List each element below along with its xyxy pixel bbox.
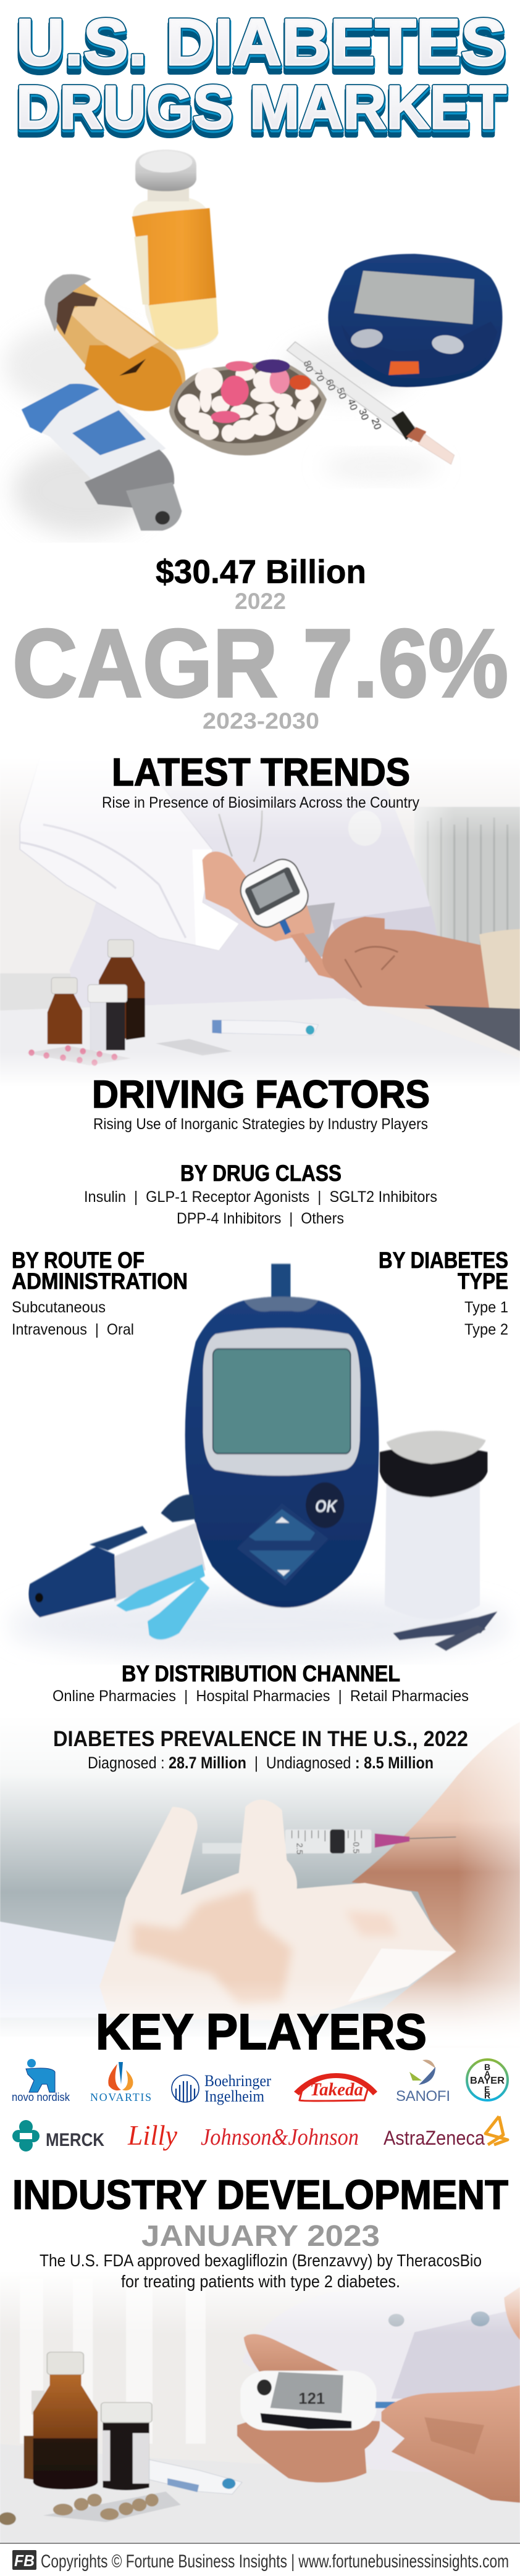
meter screen [213, 1349, 351, 1454]
icon: insulin syringe: 30 [356, 407, 371, 421]
table surface [0, 2444, 520, 2543]
heading: key players: KEY PLAYERS [96, 2004, 427, 2060]
photo: checking blood sugar with meter [0, 2271, 520, 2543]
text: development description [40, 2251, 482, 2291]
segment: by diabetes type: Type 1 [464, 1299, 508, 1316]
title: U.S. Diabetes Drugs Market [16, 5, 507, 148]
segment: by diabetes type: TYPE [458, 1269, 508, 1294]
title: U.S. Diabetes Drugs Market: U.S. DIABETES [16, 5, 506, 79]
logo: Sanofi [396, 2060, 450, 2105]
hero photo: diabetes supplies [3, 149, 503, 535]
icon: upright vial [132, 149, 218, 352]
icon: insulin syringe: 70 [312, 368, 326, 383]
doctor's hand with meter: 121 [298, 2390, 325, 2408]
heading: by distribution channel: BY DISTRIBUTION CHANNEL [122, 1661, 400, 1686]
icon: lying vial [44, 274, 185, 411]
title: U.S. Diabetes Drugs Market: DRUGS MARKET [16, 77, 506, 146]
logo: Boehringer Ingelheim: Boehringer [204, 2072, 271, 2090]
text: development description: for treating patients with type 2 diabetes. [121, 2272, 400, 2291]
logo: Boehringer Ingelheim [172, 2072, 271, 2105]
icon: insulin syringe: 50 [334, 386, 348, 400]
doctor's hand with meter [237, 2334, 380, 2482]
couch [414, 807, 520, 952]
logo: Bayer: E [484, 2084, 490, 2094]
logo: Novartis: NOVARTIS [90, 2091, 151, 2103]
table top [0, 998, 520, 1086]
test strip with blood drop [375, 2402, 401, 2408]
icon: insulin syringe: 60 [324, 378, 337, 392]
medicine bottles [48, 940, 145, 1050]
logo: Bayer: A [484, 2069, 490, 2079]
icon: pill bowl [169, 360, 327, 455]
doctor's hand [203, 851, 315, 942]
insulin pen [212, 1020, 319, 1035]
blister pack [0, 2491, 181, 2525]
icon: insulin syringe [287, 342, 455, 465]
syringe [203, 1829, 456, 1854]
syringe: 0.5 [351, 1842, 361, 1853]
white coat [242, 2271, 520, 2481]
logo: Novo Nordisk [12, 2059, 70, 2103]
insulin pen [149, 2459, 242, 2494]
text: trend description: Rise in Presence of Biosimilars Across the Country [102, 794, 419, 811]
test strip in meter [271, 1264, 290, 1311]
dark labelled bottle [101, 2403, 152, 2490]
logo: Takeda: Takeda [310, 2079, 363, 2100]
white sleeve [0, 1921, 116, 2018]
patient's hand [382, 2385, 520, 2503]
syringe: 2.5 [295, 1843, 304, 1854]
base year: 2022 [235, 589, 286, 614]
logos: key players [12, 2059, 508, 2151]
blue lancets [116, 1564, 209, 1639]
icon: insulin syringe: 80 [301, 359, 315, 373]
test strip vial [380, 1431, 487, 1619]
logo: Merck [12, 2120, 104, 2151]
heading: diabetes prevalence: DIABETES PREVALENCE IN THE U.S., 2022 [53, 1727, 468, 1751]
segment: by route of administration [12, 1248, 188, 1338]
heading: latest trends: LATEST TRENDS [112, 751, 410, 794]
blister packs [27, 1039, 232, 1066]
title: U.S. Diabetes Drugs Market: U.S. DIABETES [16, 9, 506, 83]
segment: by route of administration: Intravenous | Oral [12, 1321, 134, 1338]
heading: driving factors: DRIVING FACTORS [92, 1073, 430, 1116]
amber bottle [24, 2352, 98, 2490]
logo: Fortune Business Insights: FB [14, 2551, 35, 2570]
logo: Novo Nordisk: novo nordisk [12, 2091, 70, 2103]
meter top notch [244, 1296, 319, 1312]
logo: AstraZeneca: AstraZeneca [384, 2127, 485, 2149]
logo: Bayer: R [484, 2090, 490, 2100]
segment: by diabetes type [379, 1248, 508, 1338]
text: diagnosed and undiagnosed figures: Diagnosed : 28.7 Million | Undiagnosed : 8.5 Million [88, 1754, 434, 1772]
segment: by drug class [84, 1161, 437, 1227]
navy meter body [185, 1296, 379, 1608]
forecast period: 2023-2030 [203, 708, 319, 734]
up and down keys [237, 1503, 329, 1586]
title: U.S. Diabetes Drugs Market: U.S. DIABETES [17, 7, 506, 81]
logo: Bayer: BAYER [470, 2076, 505, 2086]
logo: Takeda [294, 2073, 377, 2101]
icon: blue glucose meter [328, 254, 503, 387]
OK button: OK [315, 1497, 338, 1516]
photo: gloved hands giving an injection [0, 1715, 520, 2049]
icon: lancing pen [22, 384, 182, 531]
handheld meter [235, 853, 319, 946]
title: U.S. Diabetes Drugs Market: U.S. DIABETES [16, 12, 506, 86]
logo: Sanofi: SANOFI [396, 2088, 450, 2105]
title: U.S. Diabetes Drugs Market: DRUGS MARKET [17, 75, 507, 143]
logo: Johnson & Johnson: Johnson&Johnson [201, 2124, 359, 2150]
segment: by drug class: DPP-4 Inhibitors | Others [177, 1210, 344, 1227]
logo: Bayer [467, 2060, 508, 2100]
patient's arm [332, 1722, 520, 2049]
title: U.S. Diabetes Drugs Market: DRUGS MARKET [16, 73, 506, 141]
logo: AstraZeneca [384, 2116, 508, 2149]
title: U.S. Diabetes Drugs Market: U.S. DIABETES [16, 5, 506, 79]
icon: insulin syringe: 40 [345, 397, 359, 412]
logo: Merck: MERCK [46, 2130, 104, 2150]
photo: doctor testing patient's glucose [0, 756, 520, 1087]
segment: by drug class: Insulin | GLP-1 Receptor Agonists | SGLT2 Inhibitors [84, 1188, 437, 1206]
lancing device [28, 1494, 206, 1617]
text: distribution channels: Online Pharmacies | Hospital Pharmacies | Retail Pharmacies [52, 1688, 469, 1705]
OK button [306, 1482, 344, 1528]
date: January 2023: JANUARY 2023 [141, 2220, 380, 2253]
logo: Novartis [90, 2062, 151, 2103]
test strips [393, 1612, 498, 1651]
meter bezel [203, 1328, 361, 1476]
doctor's coat [20, 757, 455, 1007]
segment: by drug class: BY DRUG CLASS [180, 1161, 342, 1186]
segment: by route of administration: BY ROUTE OF [12, 1248, 145, 1273]
title: U.S. Diabetes Drugs Market: DRUGS MARKET [16, 80, 506, 148]
text: driver description: Rising Use of Inorganic Strategies by Industry Players [93, 1116, 428, 1133]
footer [0, 2543, 520, 2576]
sweater cuff [479, 929, 520, 1020]
logo: Boehringer Ingelheim: Ingelheim [204, 2087, 264, 2105]
segment: by diabetes type: Type 2 [464, 1321, 508, 1338]
logo: Lilly: Lilly [127, 2119, 178, 2151]
logo: Bayer: B [484, 2062, 490, 2072]
segment: by route of administration: ADMINISTRATION [12, 1269, 188, 1294]
icon: insulin syringe: 20 [369, 416, 384, 431]
patient's hand [290, 917, 494, 1013]
photo: glucose meter kit [7, 1264, 511, 1657]
market size value: $30.47 Billion [156, 553, 366, 590]
gloved hands [99, 1800, 456, 2021]
segment: by route of administration: Subcutaneous [12, 1299, 106, 1316]
title: U.S. Diabetes Drugs Market: DRUGS MARKET [16, 73, 506, 141]
